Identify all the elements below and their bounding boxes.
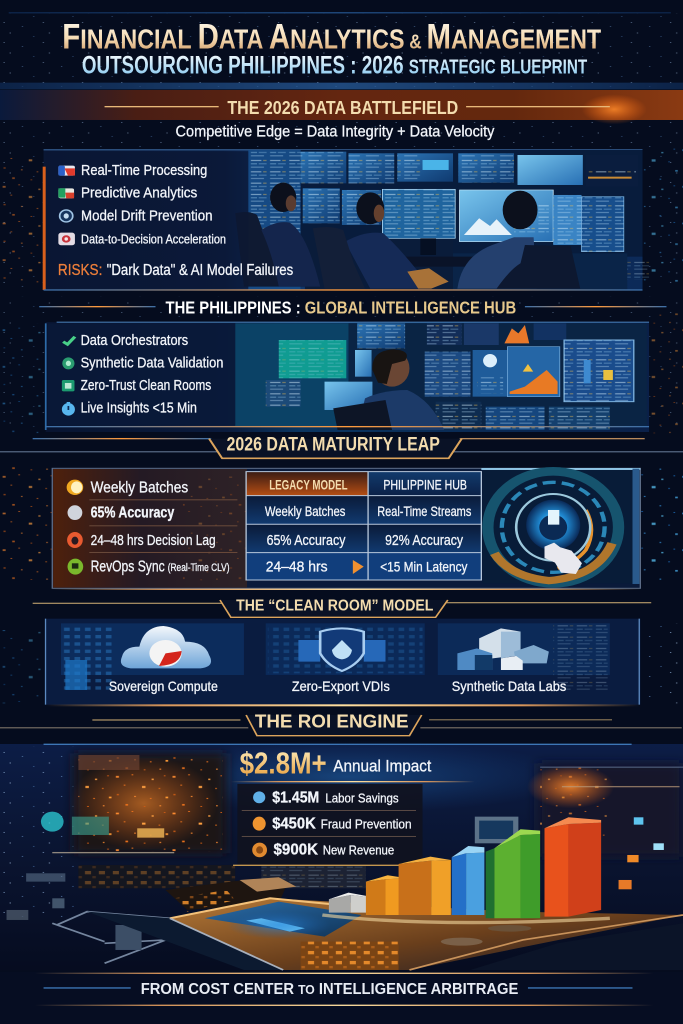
teal glow <box>72 817 109 835</box>
item: labor savings: $1.45M <box>272 788 319 806</box>
item: live insights <box>62 400 197 416</box>
item: synthetic data validation: Synthetic Data Validation <box>81 355 223 371</box>
right blue particles <box>640 467 683 580</box>
item: data-to-decision acceleration: Data-to-Decision Acceleration <box>81 232 226 247</box>
item: fraud prevention: Fraud Prevention <box>321 817 412 832</box>
table cell: Weekly Batches <box>265 504 345 519</box>
left fade over hub monitors <box>48 323 235 425</box>
item: live insights: Live Insights <15 Min <box>81 400 197 416</box>
header double rule <box>0 83 683 89</box>
left fade over monitors <box>46 152 248 288</box>
footer rule bottom <box>35 1005 653 1006</box>
savings list <box>233 784 423 866</box>
item: predictive analytics <box>58 184 197 201</box>
list: battlefield items <box>58 162 293 278</box>
banner text: THE ROI ENGINE <box>255 710 409 732</box>
mid-ground city blocks <box>7 865 366 920</box>
hub monitor wall <box>235 323 647 430</box>
hub orb <box>483 354 497 367</box>
left orange particles <box>0 467 52 580</box>
item: real-time processing: Real-Time Processing <box>81 162 207 178</box>
item: revops sync: (Real-Time CLV) <box>168 562 230 574</box>
bar reflection <box>322 915 610 923</box>
person three <box>457 191 580 289</box>
caption: Synthetic Data Labs <box>452 679 566 694</box>
item: 65 percent accuracy <box>68 504 174 521</box>
band glow <box>582 94 647 124</box>
person one <box>235 183 320 287</box>
table cell: 92% Accuracy <box>385 532 463 548</box>
philippines map shape <box>544 543 582 574</box>
hub starfield <box>0 297 683 430</box>
item: weekly batches <box>67 478 188 496</box>
banner text: 2026 DATA MATURITY LEAP <box>227 433 440 455</box>
icon: data cubes <box>457 628 549 670</box>
item: labor savings <box>253 788 399 806</box>
roi rule <box>44 744 632 745</box>
title line one: FINANCIAL DATA ANALYTICS & MANAGEMENT <box>62 17 601 56</box>
starfield background <box>0 13 683 290</box>
bar grey <box>329 893 379 913</box>
risks line <box>58 260 293 278</box>
table cell: <15 Min Latency <box>380 560 468 575</box>
heading text: THE PHILIPPINES : GLOBAL INTELLIGENCE HUB <box>166 298 516 318</box>
item: new revenue: $900K <box>274 840 318 858</box>
card: synthetic data labs <box>438 623 610 694</box>
monitor wall <box>248 150 649 290</box>
section: clean room and roi engine <box>0 596 683 1024</box>
item: decision lag: 24–48 hrs Decision Lag <box>91 532 216 548</box>
risks line: "Dark Data" & AI Model Failures <box>107 261 293 278</box>
footer rule top <box>35 973 653 974</box>
equation subtitle: Competitive Edge = Data Integrity + Data Velocity <box>176 122 495 140</box>
item: fraud prevention: $450K <box>272 814 316 832</box>
arrow: legacy to hub <box>353 560 364 574</box>
item: zero-trust clean rooms <box>62 377 211 393</box>
top rule <box>9 11 671 14</box>
item: synthetic data validation <box>62 355 223 371</box>
heading banner: roi engine <box>0 710 682 736</box>
orange skyline: left <box>41 753 227 853</box>
footer text: FROM COST CENTER TO INTELLIGENCE ARBITRAGE <box>141 980 518 997</box>
glass platform <box>87 898 683 970</box>
blue light <box>634 817 643 825</box>
impact label: Annual Impact <box>333 757 432 776</box>
item: revops sync: RevOps Sync <box>91 558 165 575</box>
title <box>62 17 601 79</box>
bar blue <box>452 846 484 915</box>
left particles <box>0 630 44 703</box>
grey left blocks <box>26 873 65 882</box>
item: real-time processing <box>58 162 207 178</box>
impact value: $2.8M+ <box>240 746 327 780</box>
item: new revenue <box>252 840 394 858</box>
card: sovereign compute <box>61 623 244 694</box>
item: data orchestrators: Data Orchestrators <box>81 332 188 348</box>
table cell: 24–48 hrs <box>266 559 328 575</box>
item: fraud prevention <box>253 814 412 832</box>
roi panel background <box>0 744 683 971</box>
panel: battlefield <box>43 149 649 291</box>
bar green <box>486 829 540 918</box>
icon: shield <box>298 628 386 671</box>
caption: Sovereign Compute <box>109 679 218 694</box>
platform glow <box>246 918 305 932</box>
bar amber <box>366 875 407 915</box>
desk papers <box>407 268 449 289</box>
blue haze <box>122 740 575 813</box>
item: labor savings: Labor Savings <box>325 791 399 806</box>
banner text: THE “CLEAN ROOM” MODEL <box>236 596 433 614</box>
3d bar chart <box>329 817 601 918</box>
radial data globe <box>481 468 640 584</box>
item: zero-trust clean rooms: Zero-Trust Clean Rooms <box>81 377 211 393</box>
person with chair <box>333 349 444 430</box>
item: new revenue: New Revenue <box>323 843 394 858</box>
panel: clean room <box>0 619 683 706</box>
item: weekly batches: Weekly Batches <box>91 478 188 496</box>
item: data orchestrators <box>63 332 188 348</box>
item: predictive analytics: Predictive Analytics <box>81 184 197 201</box>
structural beams: left <box>52 912 170 963</box>
right particles <box>643 623 683 703</box>
control screen <box>475 817 518 843</box>
table header: legacy model: LEGACY MODEL <box>269 477 348 493</box>
impact headline <box>240 746 432 780</box>
bar red <box>544 817 601 917</box>
heading: the 2026 data battlefield: THE 2026 DATA BATTLEFIELD <box>227 97 458 118</box>
section: header and data battlefield <box>0 12 683 291</box>
lit buildings <box>301 942 399 970</box>
item: model drift prevention: Model Drift Prevention <box>81 208 213 224</box>
side blue particles <box>0 323 44 433</box>
hub area chart <box>510 370 558 394</box>
list: legacy state <box>67 478 230 575</box>
item: data-to-decision acceleration <box>58 232 226 247</box>
side orange particles <box>651 313 683 433</box>
section: philippines hub and maturity leap <box>0 297 683 590</box>
orange skyline: right <box>475 763 683 889</box>
circuit discs <box>441 938 483 946</box>
list: hub capabilities <box>62 332 223 416</box>
person two <box>313 192 449 289</box>
item: 65 percent accuracy: 65% Accuracy <box>91 504 174 521</box>
lower dark fill <box>0 972 683 1024</box>
icon: cloud with pie <box>121 626 211 668</box>
panel: maturity leap <box>52 468 640 588</box>
impact divider <box>231 781 475 782</box>
card: zero-export vdis <box>266 623 425 694</box>
table cell: Real-Time Streams <box>377 504 471 519</box>
comparison table <box>246 472 481 580</box>
caption: Zero-Export VDIs <box>292 679 390 694</box>
particles: far left <box>0 747 78 920</box>
panel: intelligence hub <box>45 322 649 432</box>
table header: philippine hub: PHILIPPINE HUB <box>383 477 467 493</box>
bar orange <box>399 857 451 915</box>
right blue particles <box>644 147 683 287</box>
monitor chart peaks <box>464 218 512 235</box>
left orange particles <box>0 157 44 287</box>
heading banner: clean room model <box>33 596 651 617</box>
item: model drift prevention <box>60 208 213 224</box>
risks line: RISKS: <box>58 260 102 278</box>
platform rim <box>170 898 340 918</box>
heading band <box>0 90 683 124</box>
heading banner: data maturity leap <box>0 433 683 458</box>
table cell: 65% Accuracy <box>267 532 346 548</box>
item: decision lag <box>67 532 216 548</box>
